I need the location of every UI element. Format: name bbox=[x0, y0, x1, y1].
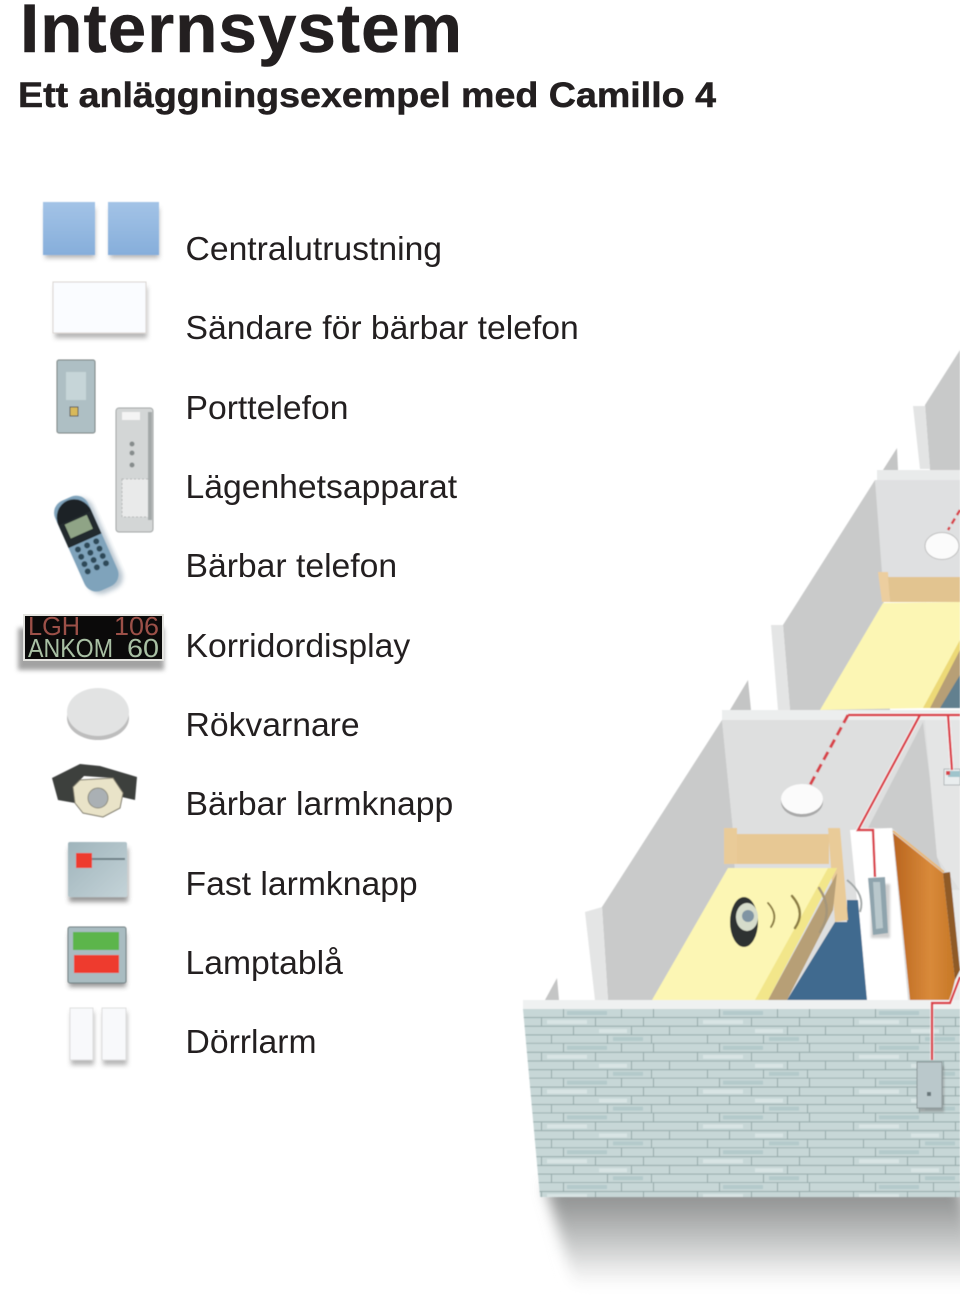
door bbox=[893, 831, 960, 1000]
icon: corridor display: 60 bbox=[127, 633, 159, 663]
label: Sändare för bärbar telefon: Sändare för bärbar telefon bbox=[186, 309, 579, 347]
solid cable halo bbox=[848, 715, 960, 1060]
icon: corridor display bbox=[18, 611, 164, 670]
icon: apartment unit bbox=[116, 408, 153, 532]
icon: fixed alarm button bbox=[68, 842, 128, 902]
icon: central equipment bbox=[43, 202, 159, 258]
label: Dörrlarm: Dörrlarm bbox=[186, 1023, 316, 1061]
label: Lamptablå: Lamptablå bbox=[186, 944, 343, 982]
top room wall bbox=[883, 350, 960, 470]
icon: wrist alarm on bed bbox=[730, 897, 758, 947]
icon: corridor display: LGH bbox=[28, 611, 80, 641]
apartment unit on wall bbox=[868, 877, 890, 938]
lower smoke detector bbox=[781, 784, 823, 817]
dashed red cable bbox=[810, 715, 848, 785]
icon: wrist alarm bbox=[52, 764, 137, 817]
upper room bbox=[730, 470, 960, 710]
door phone on brick wall bbox=[917, 1062, 944, 1112]
icon: corridor display: 106 bbox=[114, 611, 159, 641]
solid red cable core bbox=[848, 715, 960, 1060]
icon: corridor display: ANKOM bbox=[28, 633, 113, 663]
label: Bärbar telefon: Bärbar telefon bbox=[186, 547, 397, 585]
label: Bärbar larmknapp: Bärbar larmknapp bbox=[186, 785, 453, 823]
icon: door alarm bbox=[70, 1008, 127, 1065]
legend: component list bbox=[18, 202, 579, 1065]
lamp panel on wall bbox=[944, 769, 960, 785]
label: Porttelefon: Porttelefon bbox=[186, 389, 348, 427]
wall shadow bbox=[545, 1185, 960, 1288]
upper bed bbox=[820, 572, 960, 710]
cabling bbox=[810, 715, 960, 1060]
icon: lamp panel bbox=[68, 927, 126, 987]
label: Korridordisplay: Korridordisplay bbox=[186, 627, 410, 665]
upper dashed cable bbox=[948, 510, 960, 530]
icon: smoke detector bbox=[67, 688, 129, 740]
label: Fast larmknapp: Fast larmknapp bbox=[186, 865, 418, 903]
label: Rökvarnare: Rökvarnare bbox=[186, 706, 360, 744]
label: Lägenhetsapparat: Lägenhetsapparat bbox=[186, 468, 458, 506]
illustration: building cutaway bbox=[523, 350, 960, 1288]
icon: portable phone transmitter bbox=[53, 282, 147, 338]
lower room walls bbox=[545, 710, 960, 1000]
upper smoke detector bbox=[925, 532, 959, 560]
brick wall bbox=[523, 1000, 960, 1197]
subtitle: Ett anläggningsexempel med Camillo 4 bbox=[18, 76, 717, 115]
radio wave arcs bbox=[768, 888, 827, 932]
lower bed bbox=[652, 828, 848, 1000]
icon: portable phone bbox=[50, 490, 127, 599]
label: Centralutrustning: Centralutrustning bbox=[186, 230, 442, 268]
floor corridor and blue floor bbox=[787, 828, 908, 1000]
icon: door phone bbox=[57, 360, 95, 433]
